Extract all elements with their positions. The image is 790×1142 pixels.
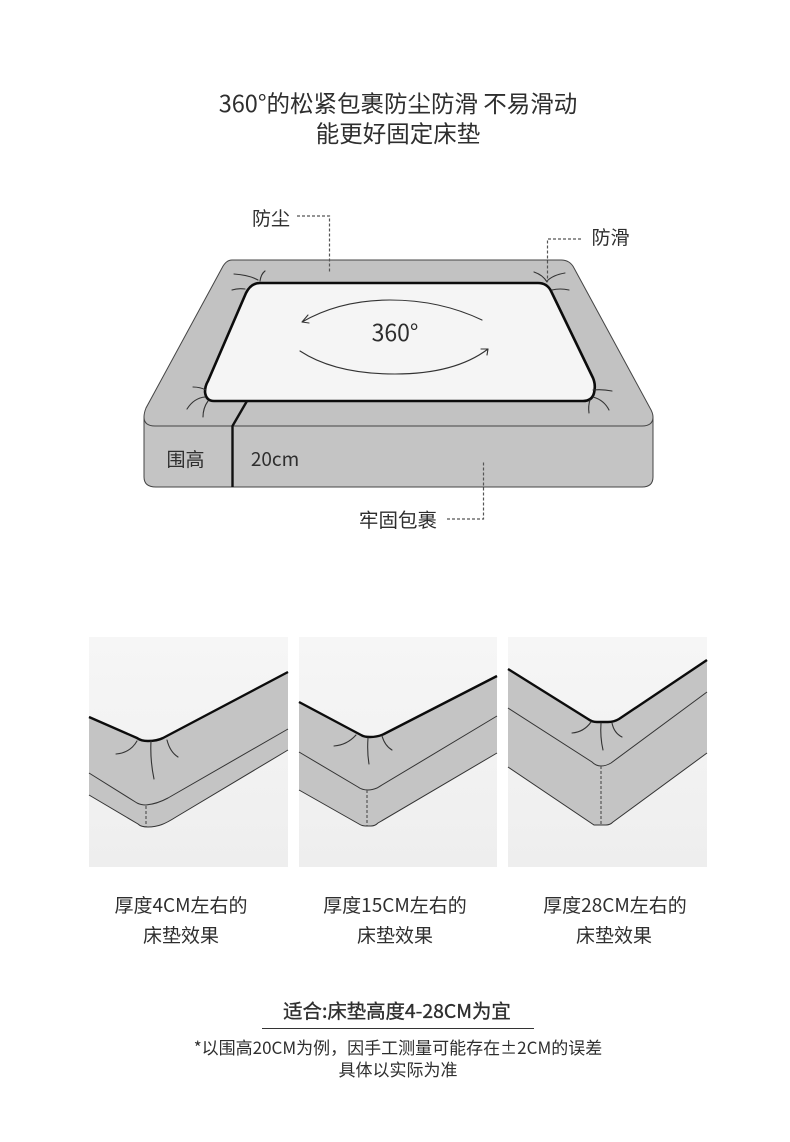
footnote <box>194 1034 602 1081</box>
title: 能更好固定床垫 <box>316 115 480 149</box>
footnote: 具体以实际为准 <box>338 1056 458 1081</box>
height divider line <box>232 401 247 487</box>
panel: 28cm thickness <box>508 637 707 867</box>
caption: 15cm: 床垫效果 <box>357 921 433 948</box>
label: 360 degrees: 360° <box>372 314 418 348</box>
mattress side wall <box>144 417 653 487</box>
footnote: *以围高20CM为例，因手工测量可能存在±2CM的误差 <box>194 1034 602 1059</box>
panel: 15cm thickness <box>299 637 497 867</box>
mattress top border <box>144 260 653 426</box>
panel: 4cm thickness <box>89 637 288 867</box>
callout: dustproof <box>252 204 330 272</box>
caption: 28cm <box>543 891 687 948</box>
rotation arrows <box>300 300 488 374</box>
label: wraparound height: 围高 <box>166 445 205 472</box>
callout: firm wrap <box>359 461 484 533</box>
corner wrinkles <box>187 271 612 417</box>
caption: 4cm <box>114 891 248 948</box>
title: 360°的松紧包裹防尘防滑 不易滑动 <box>219 85 577 119</box>
callout: anti-slip <box>548 223 630 282</box>
white sheet top surface <box>205 283 595 401</box>
callout: dustproof: 防尘 <box>252 204 290 231</box>
caption: 28cm: 床垫效果 <box>576 921 652 948</box>
callout: anti-slip: 防滑 <box>591 223 630 250</box>
title <box>219 85 577 149</box>
suitability heading: 适合:床垫高度4-28CM为宜 <box>283 995 511 1024</box>
caption: 28cm: 厚度28CM左右的 <box>543 891 687 918</box>
callout: firm wrap: 牢固包裹 <box>359 504 437 533</box>
mattress illustration <box>144 260 653 487</box>
caption: 4cm: 厚度4CM左右的 <box>114 891 248 918</box>
caption: 15cm <box>323 891 467 948</box>
caption: 4cm: 床垫效果 <box>143 921 219 948</box>
caption: 15cm: 厚度15CM左右的 <box>323 891 467 918</box>
label: 20cm: 20cm <box>251 445 299 472</box>
